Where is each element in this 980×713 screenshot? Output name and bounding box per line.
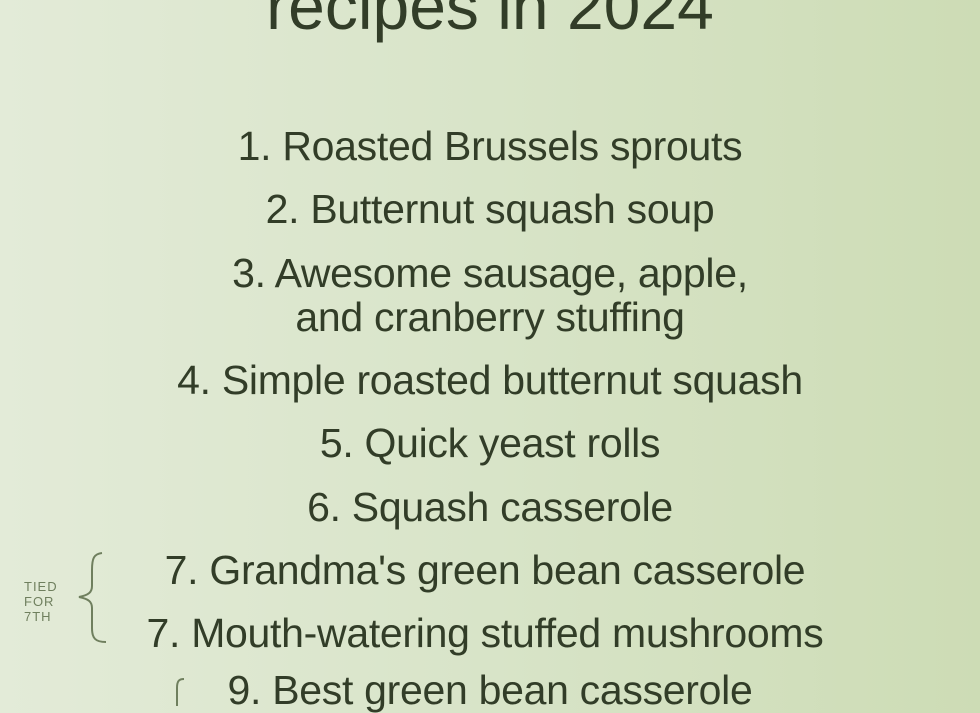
item 7b: 7. Mouth-watering stuffed mushrooms	[147, 610, 823, 656]
item 3	[232, 250, 748, 340]
item 2: 2. Butternut squash soup	[266, 186, 714, 232]
item 3: and cranberry stuffing	[295, 294, 685, 340]
item 7a: 7. Grandma's green bean casserole	[165, 547, 805, 593]
item 6: 6. Squash casserole	[307, 484, 673, 530]
icon: brace	[78, 552, 106, 643]
item 1: 1. Roasted Brussels sprouts	[238, 123, 742, 169]
item 3: 3. Awesome sausage, apple,	[232, 250, 748, 296]
icon: brace 9	[176, 678, 184, 706]
item 5: 5. Quick yeast rolls	[320, 420, 660, 466]
annotation: tied for 7th: 7TH	[24, 609, 52, 624]
item 4: 4. Simple roasted butternut squash	[177, 357, 803, 403]
item 9: 9. Best green bean casserole	[228, 667, 752, 713]
annotation: tied for 7th: TIED	[24, 579, 58, 594]
annotation: tied for 7th	[24, 579, 58, 624]
annotation: tied for 7th: FOR	[24, 594, 54, 609]
